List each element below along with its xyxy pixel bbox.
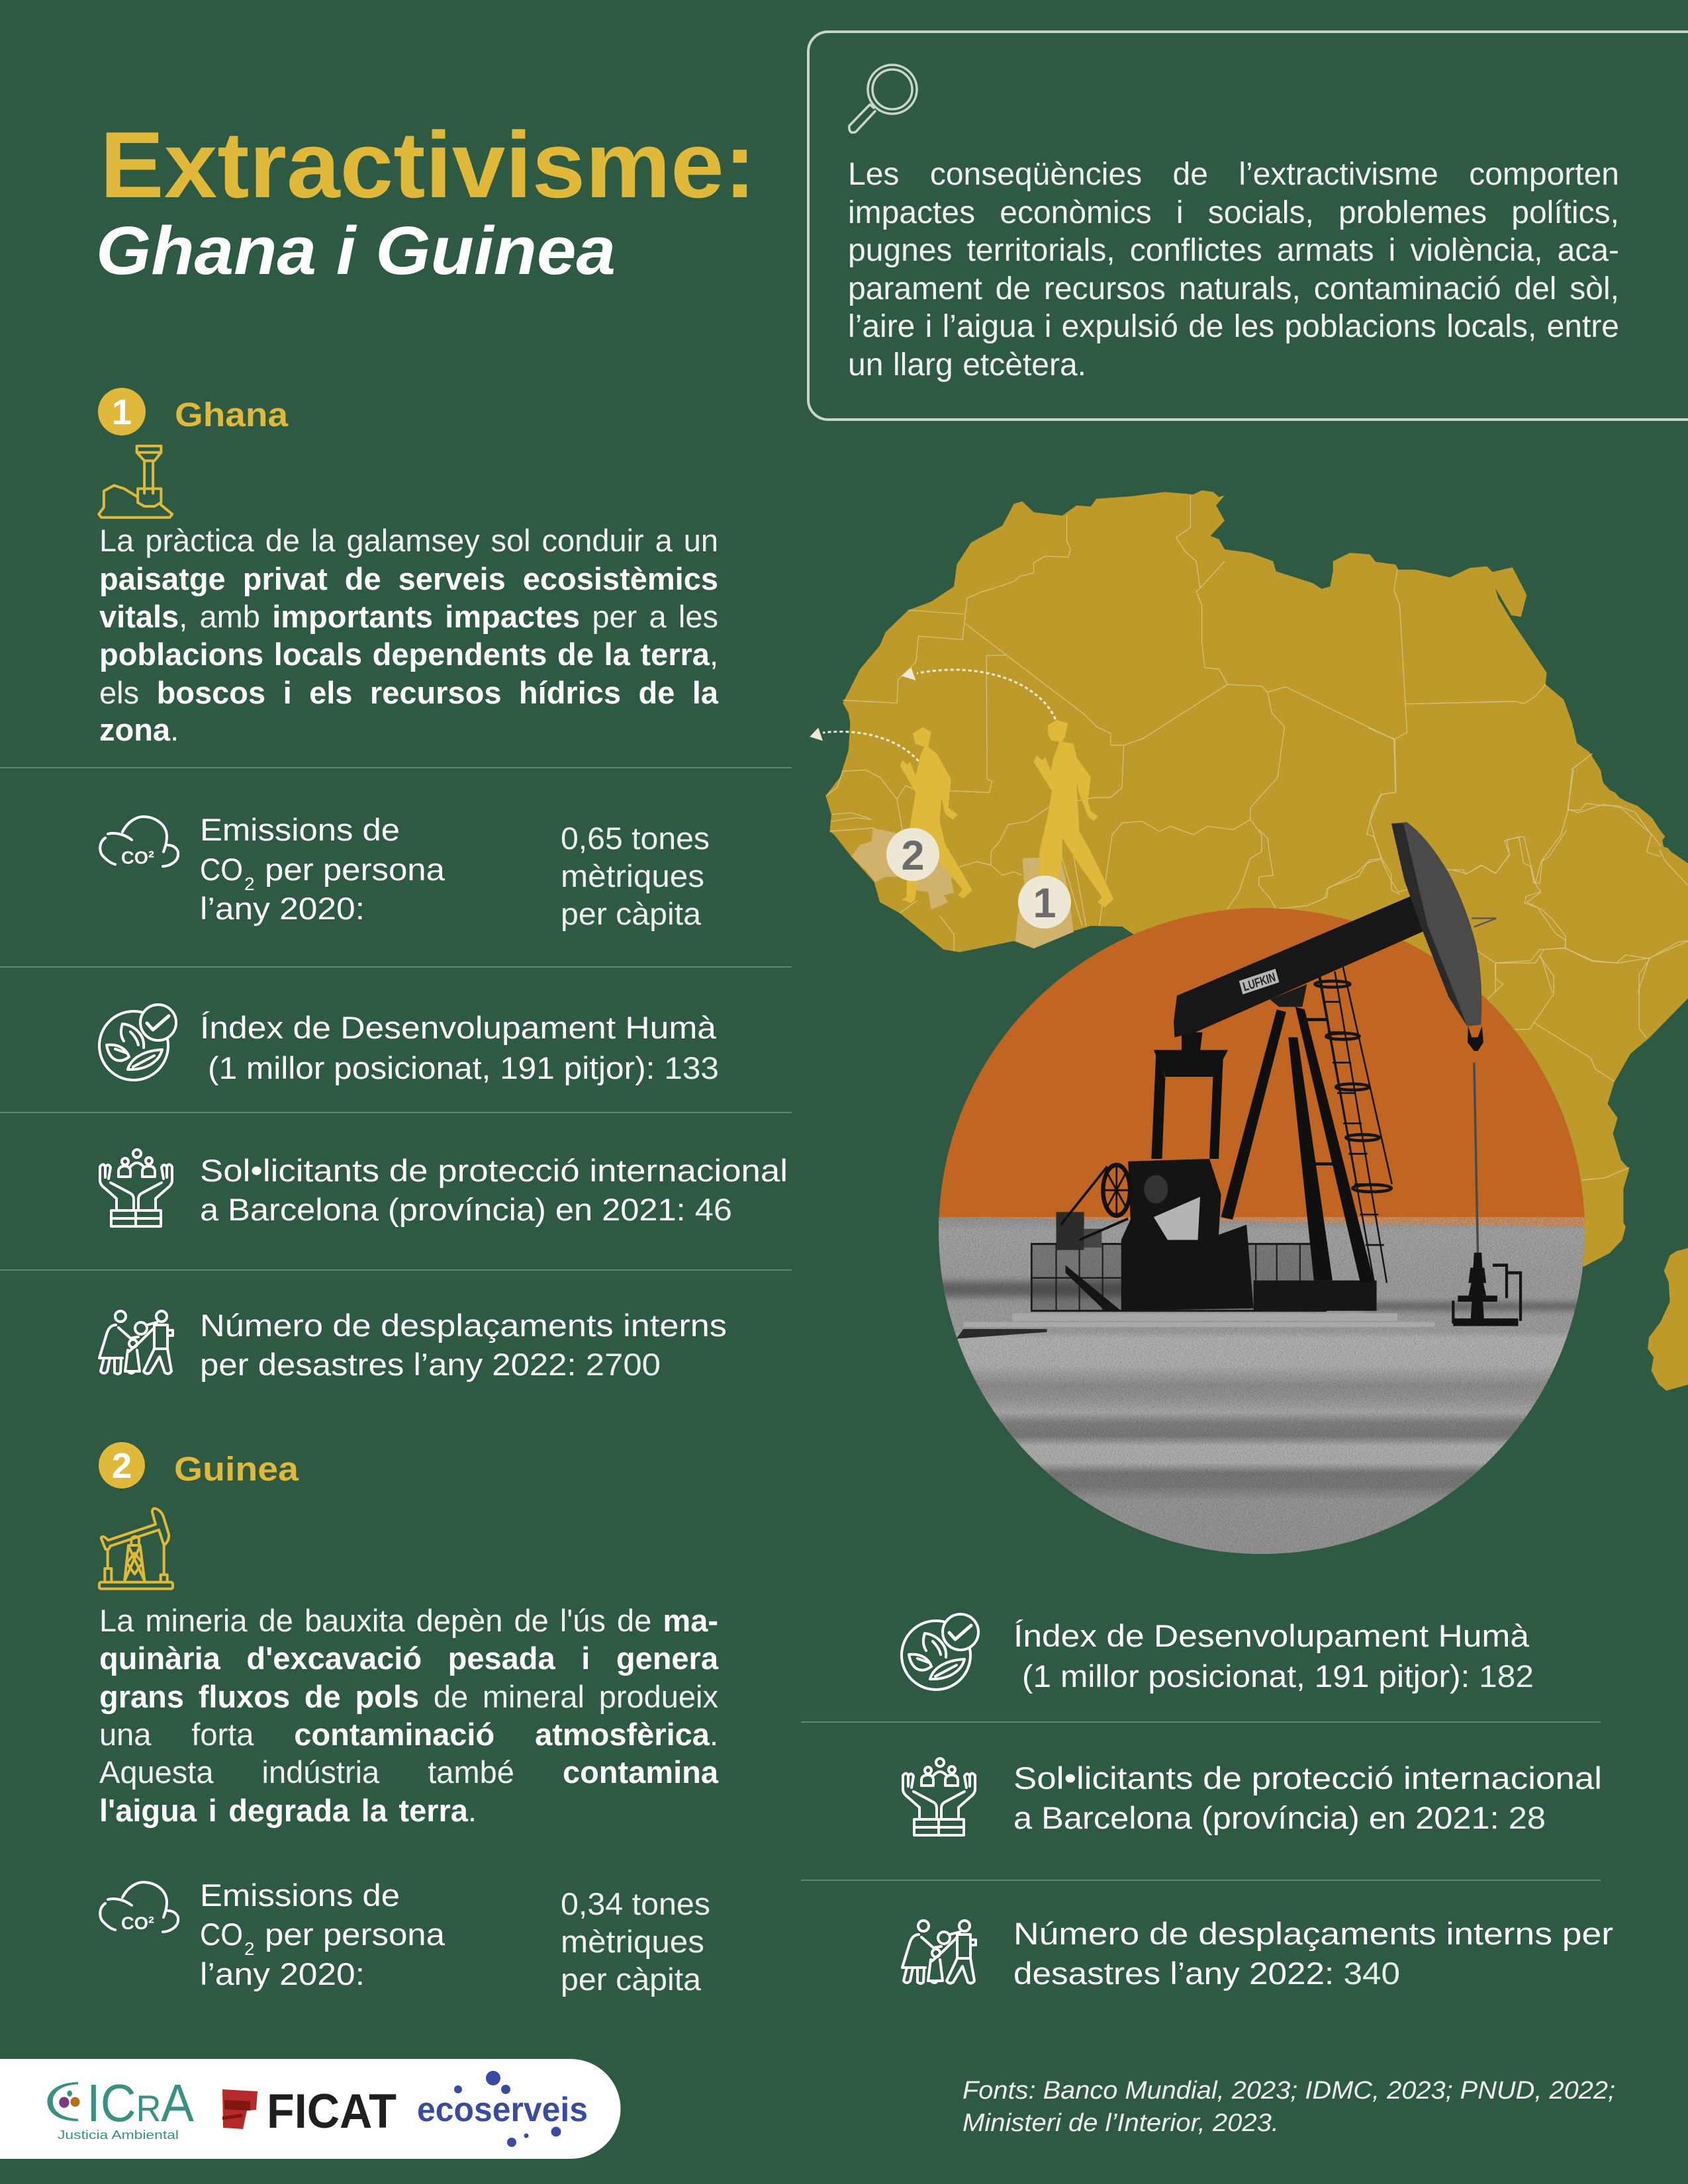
text block: introduction: l’aire i l’aigua i expulsió de les poblacions locals, entre — [848, 309, 1619, 344]
map: Ghana highlighted — [1015, 856, 1074, 948]
heading: Ghana: 1 — [112, 392, 132, 432]
icon: CO2 cloud: CO² — [121, 848, 154, 868]
icon: displaced family — [902, 1921, 976, 1983]
stat: Guinea human development index: Índex de Desenvolupament Humà — [1013, 1618, 1530, 1653]
walking figure: Ghana — [1034, 720, 1113, 907]
map landmass east — [1324, 728, 1688, 1267]
text block: introduction: impactes econòmics i socials, problemes polítics, — [848, 195, 1619, 230]
sources note: Ministeri de l’Interior, 2023. — [962, 2109, 1279, 2137]
icon: hands holding people — [903, 1758, 975, 1835]
icon: magnifying glass — [849, 65, 917, 132]
stat: Guinea internal displacements: Número de desplaçaments interns per — [1013, 1916, 1613, 1951]
icon: leaves with check — [99, 1005, 176, 1080]
arrow: migration from Ghana — [902, 668, 1055, 719]
icon: CO2 cloud — [100, 817, 178, 868]
title main line: Extractivisme: — [100, 113, 756, 218]
heading: Guinea: 2 — [112, 1446, 132, 1486]
orange sun disc and field — [927, 900, 1595, 1562]
text block: introduction: un llarg etcètera. — [848, 347, 1086, 383]
stat: Guinea CO2 emissions: 0,34 tones — [561, 1886, 710, 1921]
icon: leaves with check — [902, 1614, 978, 1690]
stat: Ghana asylum seekers: Sol•licitants de protecció internacional — [200, 1153, 788, 1188]
map: country borders west — [825, 495, 1688, 993]
stat: Guinea CO2 emissions: l’any 2020: — [200, 1956, 365, 1991]
stat: Ghana CO2 emissions: per càpita — [561, 896, 702, 931]
text block: Guinea description: La mineria de bauxita depèn de l'ús de ma- — [99, 1603, 718, 1638]
map of Africa — [810, 490, 1688, 1390]
heading: Ghana: Ghana — [175, 396, 289, 433]
stat: Ghana asylum seekers: a Barcelona (província) en 2021: 46 — [200, 1192, 732, 1227]
stat: Guinea CO2 emissions — [100, 1878, 710, 1997]
photo: circular oil pump scene — [927, 822, 1595, 1562]
icon: shovel and earth — [99, 446, 172, 518]
stat: Guinea human development index — [902, 1614, 1534, 1694]
footer: logo strip — [0, 2059, 621, 2159]
stat: Ghana CO2 emissions: mètriques — [561, 858, 704, 893]
stat: Ghana internal displacements — [99, 1308, 727, 1382]
stat: Ghana CO2 emissions: l’any 2020: — [200, 891, 365, 926]
text block: Guinea description: grans fluxos de pols de mineral produeix — [99, 1679, 718, 1714]
pump brand plate: LUFKIN — [1241, 970, 1277, 994]
title — [96, 113, 756, 289]
logo: CICRA: ICRA — [87, 2073, 195, 2132]
map: Madagascar — [1648, 1248, 1688, 1390]
map marker 2: 2 — [901, 833, 925, 879]
stat: Guinea CO2 emissions: 2 — [244, 1938, 255, 1959]
text block: Guinea description — [99, 1603, 719, 1828]
text block: Guinea description: una forta contaminació atmosfèrica. — [99, 1717, 718, 1752]
stat: Ghana CO2 emissions: 0,65 tones — [561, 821, 710, 856]
stat: Guinea asylum seekers: a Barcelona (província) en 2021: 28 — [1013, 1800, 1546, 1835]
text block: introduction: parament de recursos naturals, contaminació del sòl, — [848, 271, 1619, 306]
map landmass west and north — [825, 490, 1688, 952]
icon: hands holding people — [100, 1150, 172, 1226]
stat: Guinea internal displacements — [902, 1916, 1613, 1991]
stat: Ghana human development index: (1 millor posicionat, 191 pitjor): 133 — [208, 1050, 719, 1085]
stat: Ghana internal displacements: per desastres l’any 2022: 2700 — [200, 1347, 661, 1382]
logo: FICAT: FICAT — [267, 2085, 397, 2138]
stat: Ghana CO2 emissions — [100, 812, 710, 931]
text block: Ghana description: paisatge privat de serveis ecosistèmics — [99, 561, 718, 596]
arrow: migration from Guinea — [810, 727, 919, 761]
map: Guinea highlighted — [851, 828, 960, 909]
text block: Guinea description: Aquesta indústria també contamina — [99, 1754, 718, 1790]
heading: Guinea: Guinea — [174, 1450, 299, 1488]
stat: Guinea CO2 emissions: mètriques — [561, 1924, 704, 1959]
text block: Ghana description: els boscos i els recursos hídrics de la — [99, 675, 718, 710]
map marker 1: 1 — [1033, 880, 1056, 927]
text block: Ghana description: zona. — [99, 712, 179, 747]
text block: introduction: Les conseqüències de l’extractivisme comporten — [848, 157, 1619, 192]
text block: Ghana description: vitals, amb importants impactes per a les — [99, 599, 718, 634]
text block: introduction — [848, 157, 1619, 383]
logo: ecoserveis — [417, 2071, 588, 2147]
stat: Ghana human development index: Índex de Desenvolupament Humà — [200, 1010, 717, 1045]
stat: Ghana CO2 emissions: Emissions de — [200, 812, 400, 847]
logo: ecoserveis: ecoserveis — [417, 2091, 588, 2129]
heading: Ghana — [98, 388, 289, 435]
stat: Guinea internal displacements: desastres l’any 2022: 340 — [1013, 1956, 1400, 1991]
stat: Guinea CO2 emissions: Emissions de — [200, 1878, 400, 1913]
icon: displaced family — [99, 1311, 173, 1374]
text block: Ghana description: La pràctica de la galamsey sol conduir a un — [99, 523, 718, 558]
logo: CICRA: Justicia Ambiental — [58, 2128, 179, 2142]
stat: Guinea asylum seekers — [903, 1758, 1602, 1835]
stat: Ghana asylum seekers — [100, 1150, 788, 1227]
stat: Ghana CO2 emissions: per persona — [265, 852, 445, 887]
icon: CO2 cloud — [100, 1882, 178, 1933]
stat: Guinea asylum seekers: Sol•licitants de protecció internacional — [1013, 1760, 1602, 1796]
heading: Guinea — [99, 1442, 299, 1488]
title subtitle: Ghana i Guinea — [96, 212, 616, 289]
stat: Guinea CO2 emissions: per persona — [265, 1917, 445, 1952]
stat: Guinea human development index: (1 millor posicionat, 191 pitjor): 182 — [1022, 1659, 1534, 1694]
text block: Guinea description: l'aigua i degrada la terra. — [99, 1793, 477, 1828]
white pill background — [0, 2059, 621, 2159]
logo: CICRA — [47, 2073, 195, 2142]
text block: Ghana description: poblacions locals dependents de la terra, — [99, 637, 718, 672]
stat: Ghana CO2 emissions: 2 — [244, 874, 255, 894]
map: country borders east — [1324, 728, 1688, 1180]
sources note — [962, 2077, 1615, 2137]
stat: Ghana human development index — [99, 1005, 719, 1085]
pump jack silhouette — [957, 822, 1521, 1339]
decorative dividers — [0, 768, 1601, 1880]
icon: oil pump — [99, 1508, 173, 1589]
map marker 1 — [1018, 876, 1071, 929]
text block: Ghana description — [99, 523, 719, 747]
stat: Ghana CO2 emissions: CO — [200, 852, 243, 887]
panel: introduction box — [808, 32, 1688, 420]
stat: Guinea CO2 emissions: CO — [200, 1917, 243, 1952]
text block: introduction: pugnes territorials, conflictes armats i violència, aca- — [848, 233, 1619, 268]
stat: Guinea CO2 emissions: per càpita — [561, 1962, 702, 1997]
icon: CO2 cloud: CO² — [121, 1913, 154, 1933]
map marker 2 — [886, 828, 939, 881]
stat: Ghana internal displacements: Número de desplaçaments interns — [200, 1308, 727, 1343]
walking figure: Guinea — [900, 727, 972, 903]
text block: Guinea description: quinària d'excavació pesada i genera — [99, 1641, 718, 1676]
sources note: Fonts: Banco Mundial, 2023; IDMC, 2023; PNUD, 2022; — [962, 2077, 1615, 2105]
